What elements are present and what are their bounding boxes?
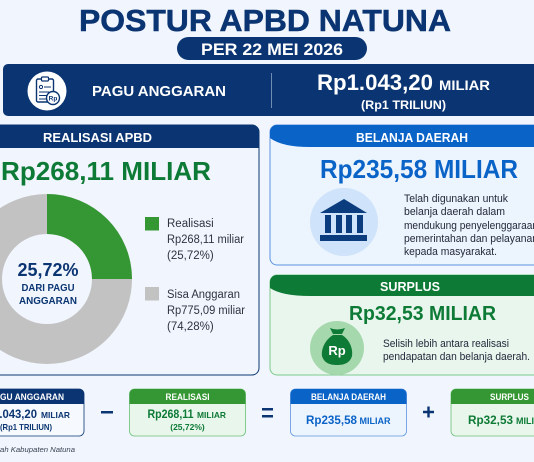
description: belanja daerah [404,193,534,258]
value: surplus: Rp32,53 MILIAR [349,303,497,325]
legend: sisa anggaran: Sisa Anggaran [167,289,240,301]
box: realisasi: MILIAR [197,410,226,420]
box: belanja daerah: Rp235,58 [306,413,357,427]
description: surplus [383,338,530,363]
box: realisasi: (25,72%) [170,422,205,432]
box: surplus: Rp32,53 [468,413,513,427]
panel: belanja daerah [270,125,534,265]
box: pagu anggaran [0,389,84,436]
box: belanja daerah: BELANJA DAERAH [311,392,386,402]
legend: realisasi: (25,72%) [167,250,214,262]
box: belanja daerah [290,389,406,436]
panel: realisasi apbd [0,125,259,375]
donut chart: ANGGARAN [19,295,77,307]
value: pagu anggaran [317,70,490,95]
panel header [0,125,259,148]
description: belanja daerah: Telah digunakan untuk [404,193,508,205]
box: pagu anggaran: MILIAR [41,410,70,420]
donut chart: DARI PAGU [22,282,74,294]
operator: minus [101,411,113,414]
legend: realisasi: Realisasi [167,218,214,230]
date pill: PER 22 MEI 2026 [201,40,343,59]
panel header [270,125,534,147]
icon: government building [310,188,378,256]
legend: sisa anggaran: Rp775,09 miliar [167,305,245,317]
donut chart: 25,72% [18,260,78,280]
box: surplus [451,389,534,436]
title: POSTUR APBD NATUNA [79,4,451,38]
box: realisasi [130,389,246,436]
description: belanja daerah: belanja daerah dalam [404,206,505,218]
icon: budget clipboard [28,72,66,110]
operator: equals [262,408,273,418]
icon: budget clipboard: Rp [49,96,57,102]
box: surplus: SURPLUS [490,392,529,402]
legend: realisasi: Rp268,11 miliar [167,234,244,246]
value: realisasi: Rp268,11 MILIAR [1,156,211,186]
panel: surplus [270,275,534,375]
operator: plus [423,406,434,418]
box: realisasi: REALISASI [166,392,210,402]
legend: sisa anggaran: (74,28%) [167,321,214,333]
label: pagu anggaran: PAGU ANGGARAN [92,83,226,100]
description: surplus: Selisih lebih antara realisasi [383,338,509,350]
date pill [177,37,367,60]
donut chart [0,194,132,344]
box: realisasi: Rp268,11 [148,409,194,421]
value note: one trillion: (Rp1 TRILIUN) [361,98,446,112]
panel header: BELANJA DAERAH [356,130,468,145]
description: belanja daerah: kepada masyarakat. [404,246,497,258]
icon: money bag [310,321,364,375]
legend: sisa anggaran [145,287,245,333]
panel header [270,275,534,296]
icon: money bag: Rp [328,343,346,358]
panel: pagu anggaran [3,64,534,116]
legend: realisasi [145,217,244,262]
value: pagu anggaran: Rp1.043,20 [317,70,433,95]
value: belanja daerah: Rp235,58 MILIAR [320,154,518,184]
panel header: REALISASI APBD [43,130,152,145]
box: pagu anggaran: (Rp1 TRILIUN) [0,422,52,432]
value: pagu anggaran: MILIAR [439,77,490,93]
panel header: SURPLUS [380,279,440,294]
box: belanja daerah: MILIAR [360,416,391,426]
